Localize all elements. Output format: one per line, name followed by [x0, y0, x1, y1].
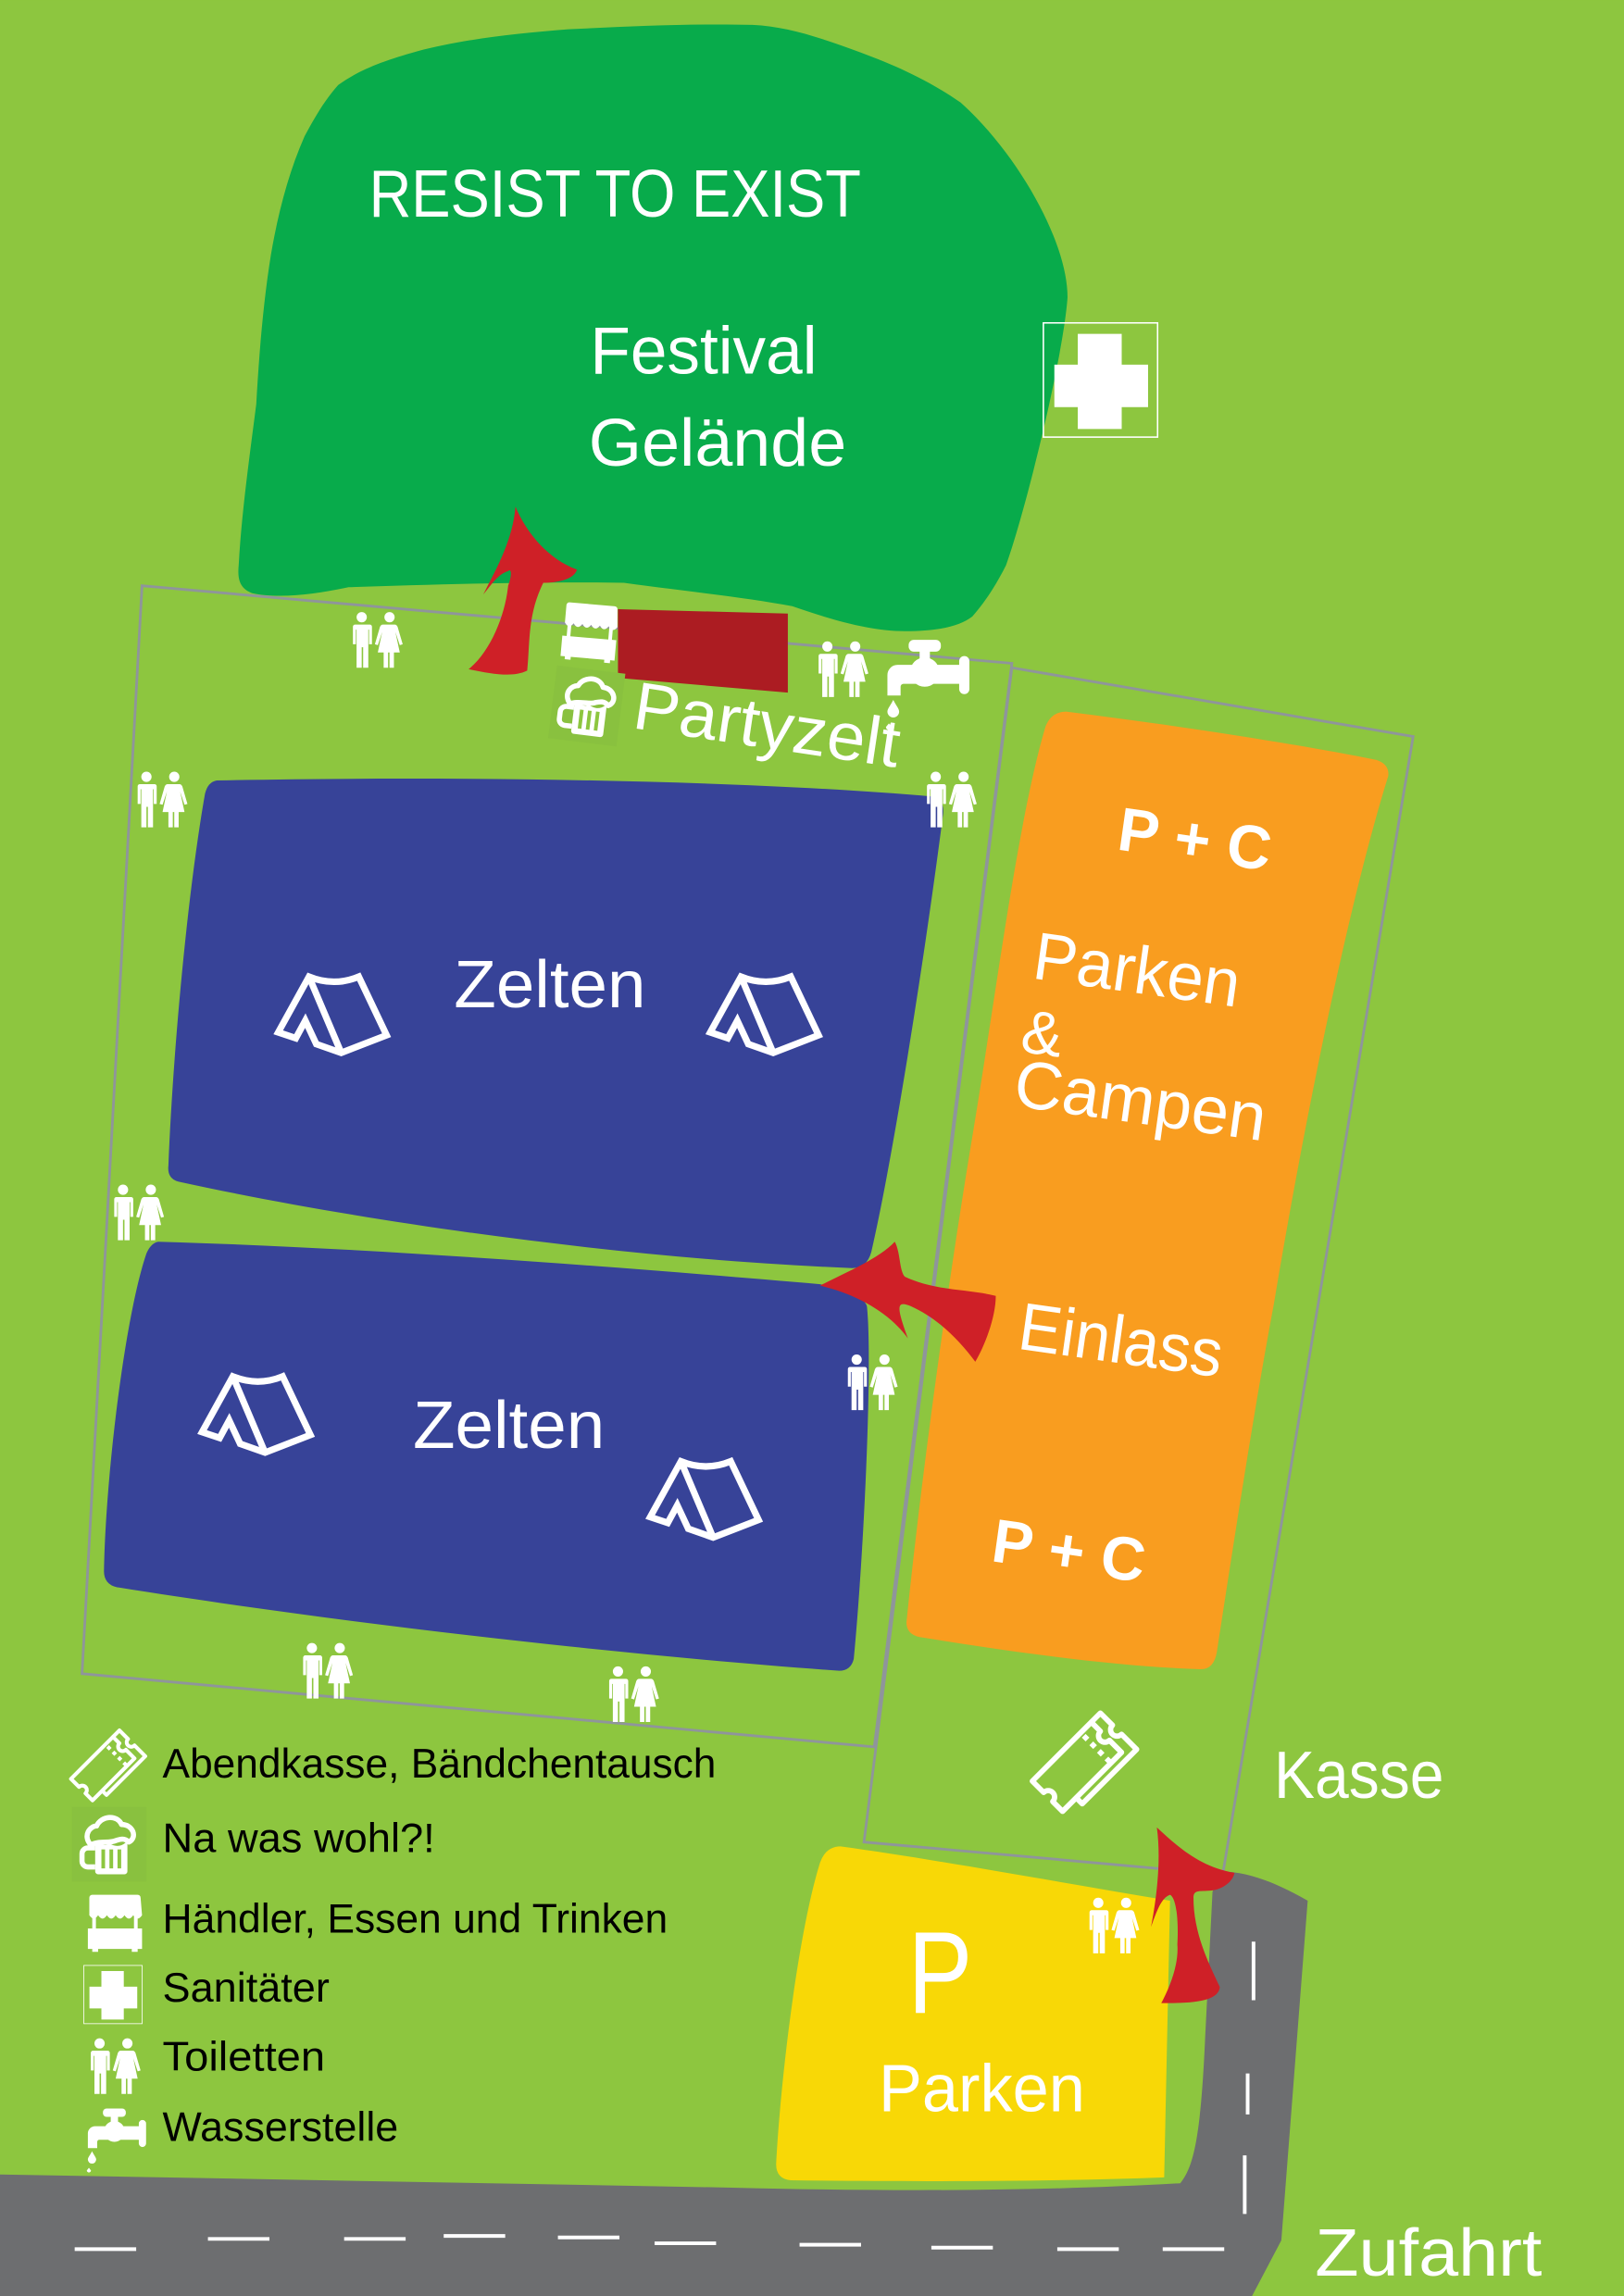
label: Parken & Campen: &	[1018, 997, 1068, 1071]
label: Zelten 1: Zelten	[454, 947, 645, 1022]
legend item: stall	[88, 1895, 668, 1952]
road	[0, 1871, 1307, 2296]
label: Parken: Parken	[879, 2052, 1085, 2127]
panel: party tent	[618, 609, 788, 693]
panel: camping field 1	[169, 779, 943, 1268]
legend item: first aid	[84, 1965, 330, 2024]
label: P + C top: P + C	[1114, 795, 1276, 884]
site boundary: parking and camping area	[864, 668, 1413, 1874]
icon: vendor stall	[560, 602, 619, 664]
legend item: first aid: Sanitäter	[163, 1965, 330, 2011]
icon: tent	[202, 1377, 310, 1453]
legend item: beer: Na was wohl?!	[163, 1816, 435, 1862]
icon: tent	[279, 977, 387, 1053]
legend item: ticket: Abendkasse, Bändchentausch	[163, 1741, 716, 1787]
label: Parken & Campen: Parken	[1029, 918, 1245, 1022]
title: RESIST TO EXIST	[369, 156, 861, 231]
legend item: ticket	[71, 1730, 716, 1804]
panel: festival area	[238, 24, 1068, 631]
panel: camping field 2	[104, 1242, 868, 1671]
label: Parken & Campen	[1010, 918, 1271, 1155]
road markings	[75, 1941, 1254, 2249]
label: Partyzelt: Partyzelt	[629, 668, 906, 782]
legend item: toilets: Toiletten	[163, 2034, 325, 2079]
legend item: stall: Händler, Essen und Trinken	[163, 1897, 668, 1942]
icon: beer	[548, 666, 625, 746]
arrow: entrance from parking	[1151, 1828, 1234, 2003]
label: P: P	[908, 1907, 972, 2039]
icon: water tap	[886, 640, 969, 730]
legend item: toilets	[91, 2034, 325, 2094]
icon: tent	[650, 1461, 758, 1538]
icon: first aid	[1043, 323, 1157, 437]
icon: tent	[710, 977, 818, 1053]
label: P + C bottom: P + C	[988, 1507, 1150, 1596]
icon: ticket	[1032, 1713, 1137, 1817]
label: Zufahrt: Zufahrt	[1315, 2215, 1542, 2290]
arrow: entrance to camping	[820, 1242, 995, 1362]
legend item: water	[87, 2104, 398, 2173]
label: Kasse: Kasse	[1274, 1738, 1443, 1813]
label: Parken & Campen: Campen	[1010, 1046, 1271, 1155]
toilets	[114, 612, 1139, 1953]
label: Festival Gelände: Festival	[590, 313, 818, 388]
arrow: to festival area	[468, 506, 577, 675]
label: Festival Gelände	[589, 313, 846, 480]
label: Zelten 2: Zelten	[413, 1388, 605, 1463]
site boundary: camping area	[82, 586, 1012, 1747]
label: Einlass: Einlass	[1014, 1289, 1228, 1391]
legend item: beer	[71, 1807, 435, 1881]
legend item: water: Wasserstelle	[163, 2104, 398, 2150]
panel: parking and camping field	[906, 712, 1389, 1669]
label: Festival Gelände: Gelände	[589, 406, 846, 480]
legend	[71, 1730, 716, 2173]
panel: parking field	[776, 1846, 1170, 2181]
